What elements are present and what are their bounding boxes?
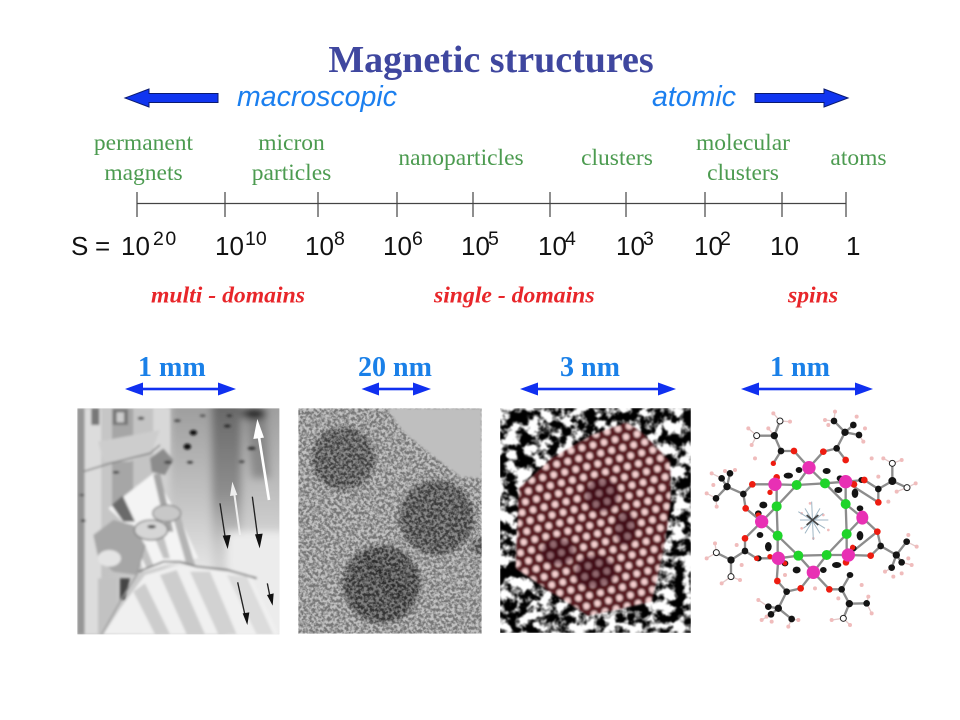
size label: 3 nm: 3 nm: [560, 352, 620, 383]
category: molecular clusters: clusters: [707, 160, 779, 186]
spin values: 10: [694, 231, 723, 261]
spin values: 1: [846, 231, 860, 261]
spin values: 3: [643, 228, 654, 250]
spin values: 10: [538, 231, 567, 261]
spin values: =: [95, 231, 110, 261]
size arrow: 20 nm: [362, 382, 431, 396]
central guest molecule: [798, 502, 828, 540]
spin values: 10: [305, 231, 334, 261]
image: magnetic domains micrograph: [77, 402, 287, 638]
spin values: 10: [616, 231, 645, 261]
spin values: 10: [215, 231, 244, 261]
spin values: 20: [153, 228, 178, 250]
nanoparticles: [312, 427, 488, 623]
category: clusters: clusters: [581, 145, 653, 171]
label: atomic: atomic: [652, 81, 736, 113]
category: micron particles: particles: [252, 160, 331, 186]
spin values: 10: [770, 231, 799, 261]
category: permanent magnets: permanent: [94, 130, 194, 156]
hydrogen bonds: [707, 412, 917, 627]
size label: 1 mm: 1 mm: [138, 352, 206, 383]
category: micron particles: micron: [258, 130, 325, 156]
spin values: 4: [565, 228, 576, 250]
spin values: 5: [488, 228, 499, 250]
spin values: 10: [383, 231, 412, 261]
hollow oxygen atoms: [713, 418, 910, 621]
spin values: 10: [121, 231, 150, 261]
regime: multi-domains: multi - domains: [151, 282, 305, 308]
spin values: 10: [245, 228, 267, 250]
spin values: 2: [720, 228, 731, 250]
size arrow: 1 nm: [741, 382, 873, 396]
arrow: toward macroscopic: [125, 89, 218, 107]
category labels: [94, 130, 887, 186]
label: macroscopic: macroscopic: [237, 81, 397, 113]
bonds: [716, 421, 907, 619]
category: molecular clusters: molecular: [696, 130, 790, 156]
spin values: [71, 228, 860, 261]
category: atoms: atoms: [830, 145, 887, 171]
red oxygen atoms: [742, 448, 882, 593]
spin values: 8: [334, 228, 345, 250]
hydrogen atoms: [705, 410, 919, 629]
spin values: 6: [412, 228, 423, 250]
scale axis: [137, 192, 846, 217]
green metal atoms: [772, 478, 852, 561]
magenta metal atoms: [755, 461, 868, 579]
spin values: S: [71, 231, 88, 261]
arrow: toward atomic: [755, 89, 848, 107]
image: atomic-resolution cluster micrograph: [500, 408, 691, 633]
regime: single-domains: single - domains: [433, 282, 595, 308]
category: nanoparticles: nanoparticles: [398, 145, 524, 171]
size arrow: 3 nm: [520, 382, 676, 396]
regime: spins: spins: [787, 282, 838, 308]
size label: 20 nm: 20 nm: [358, 352, 432, 383]
category: permanent magnets: magnets: [104, 160, 183, 186]
carbon atoms: [713, 418, 910, 622]
white and black magnetisation arrows: [220, 419, 274, 625]
regime labels: [151, 282, 838, 308]
size arrow: 1 mm: [125, 382, 236, 396]
image: nanoparticle TEM micrograph: [298, 408, 488, 634]
spin values: 10: [461, 231, 490, 261]
image: Mn12 molecular structure: [705, 410, 919, 629]
title: Magnetic structures: [328, 39, 654, 81]
cluster: lattice of atoms: [516, 422, 671, 616]
size label: 1 nm: 1 nm: [770, 352, 830, 383]
